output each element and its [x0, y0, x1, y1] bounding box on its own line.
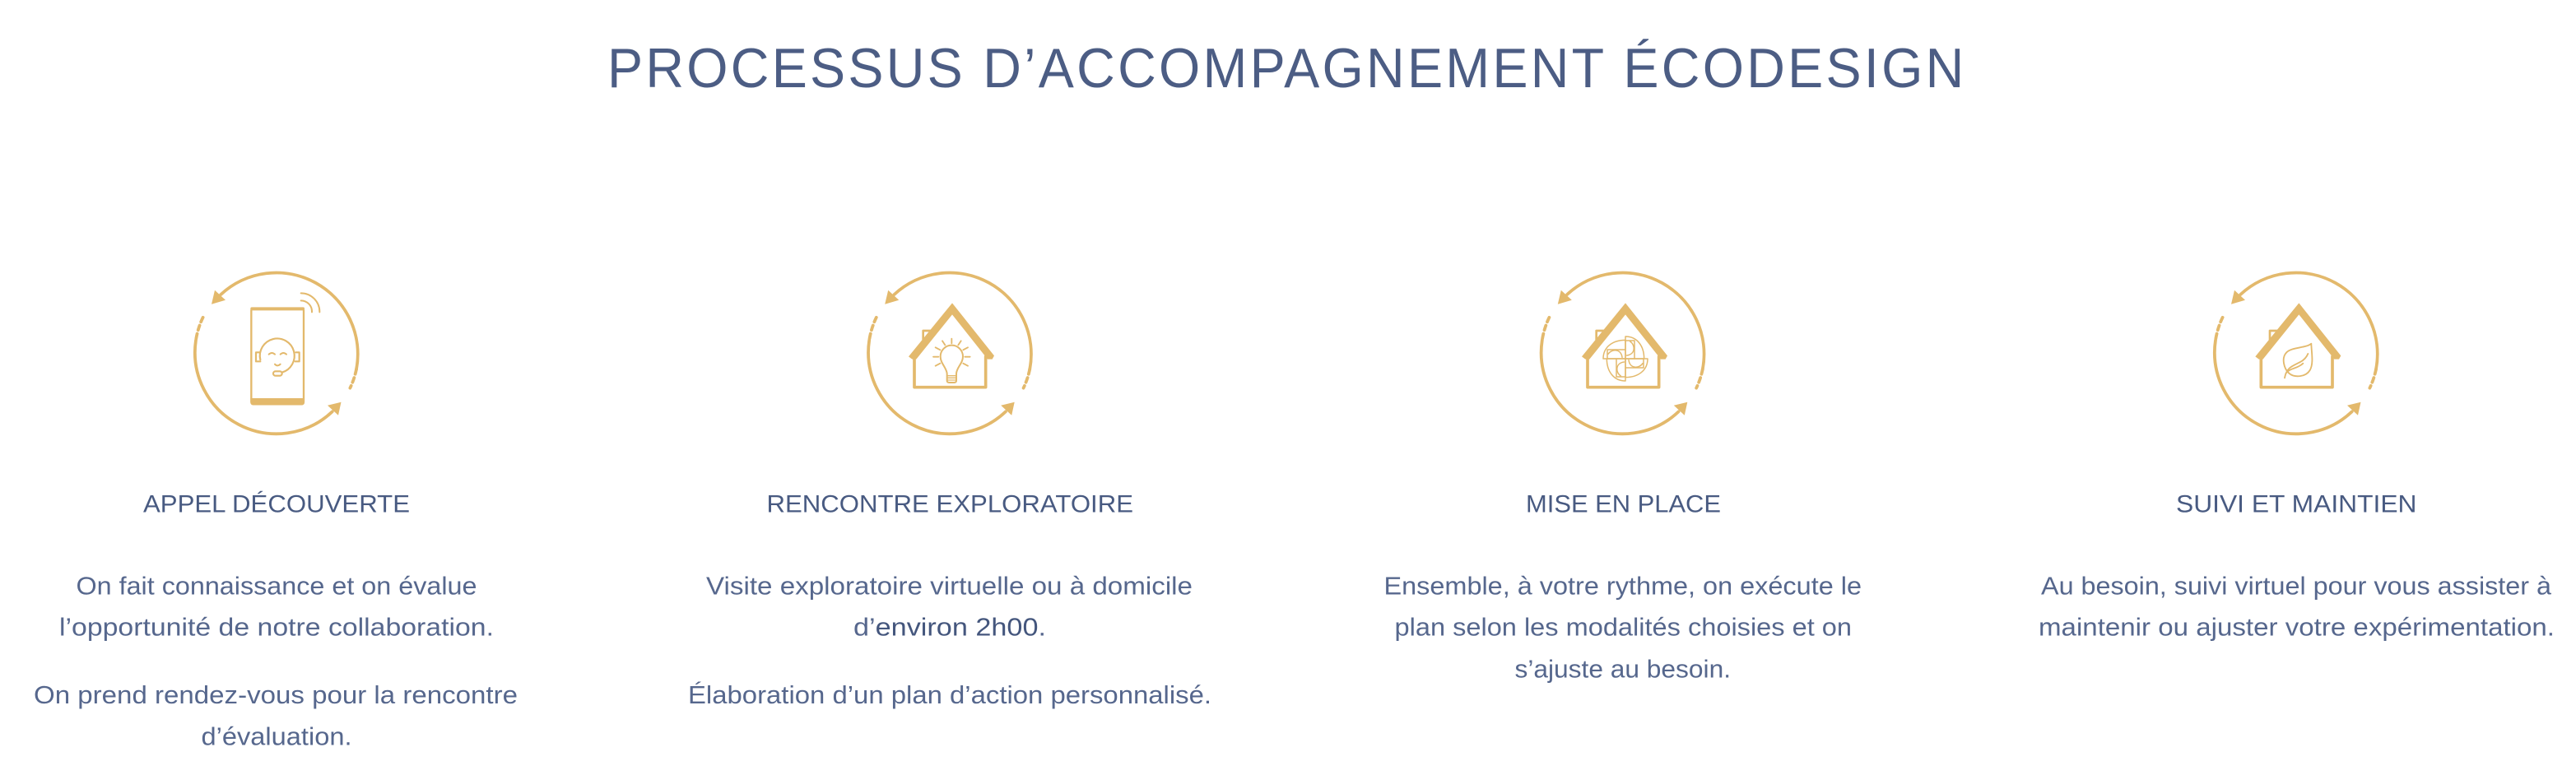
panel: mise en place — [1384, 272, 1862, 683]
heading: appel découverte: APPEL DÉCOUVERTE — [143, 490, 410, 518]
description: rencontre exploratoire — [688, 571, 1211, 709]
panel: suivi et maintien — [2039, 272, 2555, 642]
heading: mise en place: MISE EN PLACE — [1526, 490, 1721, 518]
panel: appel découverte — [34, 272, 518, 751]
description: rencontre exploratoire: Élaboration d’un plan d’action personnalisé. — [688, 680, 1211, 709]
description: appel découverte: d’évaluation. — [201, 722, 352, 750]
icon: phone with headset in circular arrows — [195, 272, 358, 434]
description: mise en place: plan selon les modalités choisies et on — [1394, 612, 1852, 642]
panel: rencontre exploratoire — [688, 272, 1211, 709]
description: mise en place: Ensemble, à votre rythme, on exécute le — [1384, 571, 1862, 601]
title: PROCESSUS D’ACCOMPAGNEMENT ÉCODESIGN — [607, 38, 1964, 100]
icon: house with light bulb in circular arrows — [868, 272, 1031, 434]
description: appel découverte: l’opportunité de notre collaboration. — [59, 612, 494, 642]
description: appel découverte — [34, 571, 518, 750]
icon: house with leaf in circular arrows — [2215, 272, 2378, 434]
heading: rencontre exploratoire: RENCONTRE EXPLORATOIRE — [767, 490, 1133, 518]
description: rencontre exploratoire: d’environ 2h00 . — [853, 612, 1046, 642]
heading: suivi et maintien: SUIVI ET MAINTIEN — [2176, 490, 2416, 518]
description: suivi et maintien — [2039, 571, 2555, 642]
description: rencontre exploratoire: Visite exploratoire virtuelle ou à domicile — [706, 571, 1193, 601]
description: appel découverte: On fait connaissance et on évalue — [76, 571, 477, 601]
description: suivi et maintien: Au besoin, suivi virtuel pour vous assister à — [2041, 571, 2552, 601]
description: suivi et maintien: maintenir ou ajuster votre expérimentation. — [2039, 612, 2555, 642]
description: appel découverte: On prend rendez-vous pour la rencontre — [34, 680, 518, 709]
icon: house with fan in circular arrows — [1541, 272, 1704, 434]
description: mise en place: s’ajuste au besoin. — [1514, 655, 1731, 683]
description: mise en place — [1384, 571, 1862, 683]
